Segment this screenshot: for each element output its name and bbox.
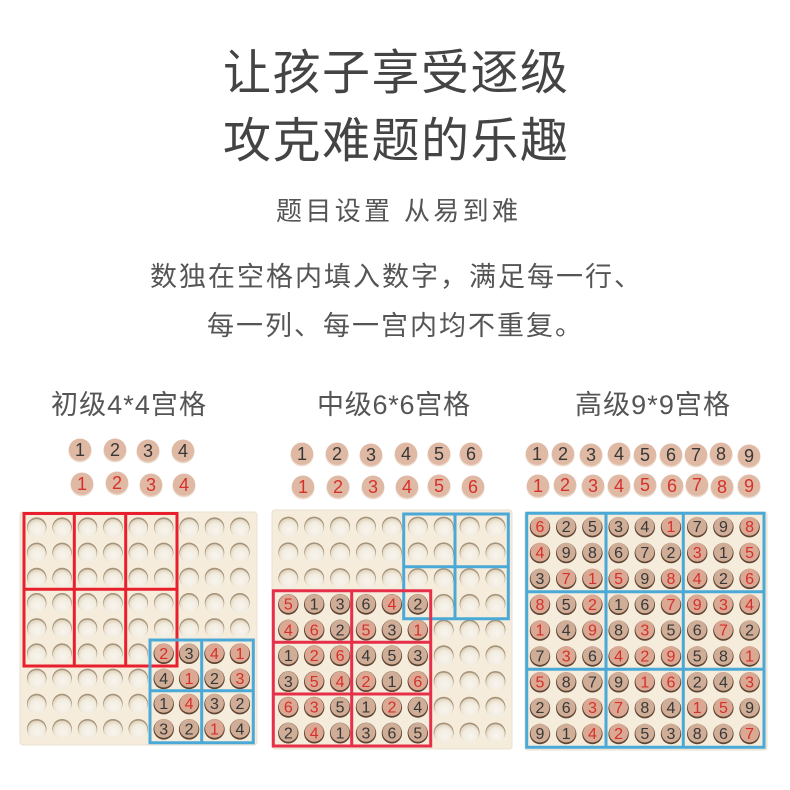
filled pieces: intermediate: 4: [336, 674, 345, 691]
filled pieces: advanced: 3: [745, 674, 754, 691]
filled pieces: advanced: 2: [667, 545, 676, 562]
filled pieces: advanced: 4: [745, 597, 754, 614]
filled pieces: intermediate: 2: [362, 674, 371, 691]
loose pieces: advanced: 2: [558, 444, 568, 464]
loose pieces: advanced: 6: [667, 476, 677, 496]
filled pieces: advanced: 6: [745, 571, 754, 588]
filled pieces: intermediate: 1: [362, 700, 371, 716]
loose pieces: beginner: [68, 438, 196, 497]
filled pieces: advanced: [530, 517, 760, 744]
heading: intermediate: 中级6*6宫格: [317, 390, 470, 420]
filled pieces: advanced: 4: [536, 545, 545, 562]
filled pieces: beginner: 2: [210, 671, 219, 688]
loose pieces: intermediate: [290, 442, 485, 499]
filled pieces: advanced: 2: [588, 597, 597, 614]
filled pieces: advanced: 5: [693, 648, 702, 666]
filled pieces: beginner: 2: [159, 646, 168, 663]
loose pieces: advanced: 8: [716, 444, 726, 464]
heading: advanced: 高级9*9宫格: [575, 390, 730, 420]
blue grid: 4*4 outline: [404, 514, 508, 619]
filled pieces: intermediate: 6: [387, 725, 396, 742]
loose pieces: intermediate: 5: [434, 476, 444, 496]
filled pieces: beginner: 3: [235, 671, 244, 688]
filled pieces: advanced: 6: [588, 648, 597, 666]
filled pieces: intermediate: 2: [336, 622, 345, 639]
filled pieces: advanced: 5: [562, 597, 571, 614]
filled pieces: advanced: 2: [614, 726, 623, 743]
filled pieces: advanced: 7: [640, 545, 649, 562]
loose pieces: advanced: 5: [640, 475, 650, 495]
filled pieces: advanced: 8: [745, 519, 754, 536]
filled pieces: advanced: 4: [640, 519, 649, 536]
loose pieces: intermediate: 5: [434, 444, 444, 464]
filled pieces: advanced: 1: [693, 700, 702, 717]
description text: 每一列、每一宫内均不重复。: [207, 311, 582, 341]
filled pieces: intermediate: 3: [310, 700, 319, 716]
loose pieces: advanced: 6: [666, 445, 676, 465]
filled pieces: intermediate: 4: [362, 648, 371, 665]
board: beginner: [20, 512, 257, 745]
filled pieces: intermediate: 1: [284, 648, 293, 665]
filled pieces: advanced: 2: [562, 519, 571, 536]
filled pieces: advanced: 8: [667, 571, 676, 588]
loose pieces: advanced: 2: [560, 475, 570, 495]
filled pieces: advanced: 5: [614, 571, 623, 588]
loose pieces: beginner: 1: [75, 440, 85, 460]
filled pieces: intermediate: 1: [336, 725, 345, 742]
filled pieces: advanced: 3: [562, 648, 571, 666]
board: advanced: [525, 512, 767, 750]
description text: 数独在空格内填入数字，满足每一行、: [150, 262, 641, 292]
filled pieces: advanced: 2: [693, 674, 702, 691]
filled pieces: beginner: 3: [210, 696, 219, 713]
loose pieces: beginner: 4: [178, 441, 188, 461]
filled pieces: advanced: 7: [693, 519, 702, 536]
title: 让孩子享受逐级: [223, 47, 568, 100]
filled pieces: advanced: 8: [719, 648, 728, 666]
filled pieces: advanced: 7: [614, 700, 623, 717]
filled pieces: advanced: 6: [640, 597, 649, 614]
subtitle: 题目设置 从易到难: [276, 196, 518, 226]
filled pieces: advanced: 5: [588, 519, 597, 536]
loose pieces: intermediate: 1: [298, 477, 308, 497]
filled pieces: advanced: 5: [667, 623, 676, 640]
filled pieces: advanced: 2: [640, 648, 649, 666]
filled pieces: intermediate: 5: [310, 674, 319, 691]
red grid: 6*6 outline: [24, 514, 177, 666]
filled pieces: beginner: 4: [159, 671, 168, 688]
filled pieces: advanced: 8: [614, 623, 623, 640]
filled pieces: advanced: 9: [719, 519, 728, 536]
filled pieces: intermediate: 5: [284, 596, 293, 614]
loose pieces: advanced: 4: [614, 444, 624, 464]
filled pieces: intermediate: 1: [413, 622, 422, 639]
filled pieces: advanced: 3: [588, 700, 597, 717]
heading: beginner: 初级4*4宫格: [51, 390, 206, 420]
filled pieces: advanced: 3: [693, 545, 702, 562]
filled pieces: intermediate: 1: [387, 674, 396, 691]
loose pieces: intermediate: 6: [466, 444, 476, 464]
blue grid: 4*4 outline: [150, 640, 253, 743]
panel: beginner 4*4: [20, 390, 257, 745]
filled pieces: intermediate: 6: [284, 700, 293, 716]
loose pieces: advanced: 3: [586, 445, 596, 465]
loose pieces: intermediate: 3: [366, 445, 376, 465]
filled pieces: advanced: 3: [667, 726, 676, 743]
loose pieces: advanced: 8: [717, 477, 727, 497]
filled pieces: intermediate: 3: [387, 622, 396, 639]
filled pieces: beginner: 1: [235, 646, 244, 663]
filled pieces: advanced: 2: [719, 571, 728, 588]
panel: intermediate 6*6: [272, 390, 512, 749]
filled pieces: advanced: 9: [614, 674, 623, 691]
loose pieces: advanced: 1: [533, 476, 543, 496]
filled pieces: advanced: 5: [745, 545, 754, 562]
filled pieces: intermediate: 3: [413, 648, 422, 665]
filled pieces: beginner: 1: [185, 671, 194, 688]
filled pieces: advanced: 8: [640, 700, 649, 717]
filled pieces: intermediate: 4: [284, 622, 293, 639]
panel: advanced 9*9: [525, 390, 767, 750]
filled pieces: intermediate: 4: [310, 725, 319, 742]
filled pieces: intermediate: 5: [413, 725, 422, 742]
filled pieces: advanced: 8: [562, 674, 571, 691]
filled pieces: advanced: 1: [640, 674, 649, 691]
filled pieces: advanced: 1: [614, 597, 623, 614]
filled pieces: beginner: 3: [159, 721, 168, 738]
filled pieces: beginner: 1: [159, 696, 168, 713]
filled pieces: advanced: 9: [667, 648, 676, 666]
filled pieces: advanced: 1: [667, 519, 676, 536]
loose pieces: intermediate: 6: [468, 477, 478, 497]
filled pieces: advanced: 8: [588, 545, 597, 562]
filled pieces: beginner: 1: [210, 721, 219, 738]
filled pieces: beginner: 2: [185, 721, 194, 738]
loose pieces: beginner: 3: [146, 475, 156, 495]
filled pieces: intermediate: 6: [310, 622, 319, 639]
loose pieces: intermediate: 2: [333, 477, 343, 497]
filled pieces: advanced: 7: [719, 623, 728, 640]
filled pieces: intermediate: 2: [284, 725, 293, 742]
filled pieces: intermediate: 2: [310, 648, 319, 665]
filled pieces: intermediate: 5: [362, 622, 371, 639]
filled pieces: advanced: 5: [719, 700, 728, 717]
filled pieces: intermediate: 5: [387, 648, 396, 665]
loose pieces: advanced: 1: [532, 444, 542, 464]
filled pieces: intermediate: 2: [387, 700, 396, 716]
filled pieces: advanced: 9: [745, 700, 754, 717]
filled pieces: advanced: 7: [667, 597, 676, 614]
filled pieces: advanced: 1: [562, 726, 571, 743]
filled pieces: advanced: 6: [614, 545, 623, 562]
filled pieces: beginner: 3: [185, 646, 194, 663]
loose pieces: beginner: 3: [143, 441, 153, 461]
loose pieces: intermediate: 4: [401, 444, 411, 464]
filled pieces: advanced: 6: [562, 700, 571, 717]
filled pieces: advanced: 3: [536, 571, 545, 588]
loose pieces: beginner: 1: [77, 474, 87, 494]
filled pieces: intermediate: 3: [284, 674, 293, 691]
filled pieces: advanced: 9: [693, 597, 702, 614]
filled pieces: advanced: 9: [640, 571, 649, 588]
loose pieces: advanced: 4: [614, 476, 624, 496]
loose pieces: intermediate: 3: [368, 477, 378, 497]
filled pieces: advanced: 7: [536, 648, 545, 666]
filled pieces: beginner: 4: [235, 721, 244, 738]
filled pieces: advanced: 5: [640, 726, 649, 743]
filled pieces: advanced: 7: [745, 726, 754, 743]
filled pieces: advanced: 6: [667, 674, 676, 691]
loose pieces: intermediate: 1: [297, 444, 307, 464]
filled pieces: advanced: 6: [719, 726, 728, 743]
filled pieces: advanced: 4: [614, 648, 623, 666]
title: 攻克难题的乐趣: [223, 115, 568, 168]
filled pieces: intermediate: 6: [413, 674, 422, 691]
loose pieces: advanced: 9: [744, 446, 754, 466]
filled pieces: advanced: 8: [536, 597, 545, 614]
filled pieces: advanced: 4: [719, 674, 728, 691]
filled pieces: advanced: 1: [536, 623, 545, 640]
filled pieces: advanced: 7: [588, 674, 597, 691]
filled pieces: advanced: 4: [588, 726, 597, 743]
filled pieces: beginner: [154, 644, 250, 740]
red grid: 6*6 outline: [273, 591, 431, 746]
filled pieces: beginner: 4: [185, 696, 194, 713]
filled pieces: intermediate: 4: [387, 596, 396, 614]
filled pieces: beginner: 4: [210, 646, 219, 663]
filled pieces: intermediate: [278, 594, 428, 744]
filled pieces: advanced: 8: [693, 726, 702, 743]
filled pieces: intermediate: 2: [413, 596, 422, 614]
filled pieces: advanced: 3: [640, 623, 649, 640]
loose pieces: advanced: 9: [744, 476, 754, 496]
filled pieces: advanced: 4: [562, 623, 571, 640]
loose pieces: advanced: [525, 442, 761, 499]
filled pieces: intermediate: 3: [336, 596, 345, 614]
filled pieces: advanced: 9: [562, 545, 571, 562]
filled pieces: advanced: 6: [693, 623, 702, 640]
filled pieces: advanced: 9: [588, 623, 597, 640]
filled pieces: intermediate: 5: [336, 700, 345, 716]
title: [223, 47, 568, 168]
description text: [150, 262, 641, 341]
loose pieces: beginner: 2: [112, 473, 122, 493]
loose pieces: beginner: 2: [110, 440, 120, 460]
filled pieces: intermediate: 1: [310, 596, 319, 614]
filled pieces: advanced: 9: [536, 726, 545, 743]
filled pieces: advanced: 2: [745, 623, 754, 640]
filled pieces: advanced: 2: [536, 700, 545, 717]
filled pieces: intermediate: 6: [362, 596, 371, 614]
loose pieces: advanced: 5: [640, 445, 650, 465]
filled pieces: advanced: 4: [693, 571, 702, 588]
filled pieces: intermediate: 6: [336, 648, 345, 665]
loose pieces: advanced: 7: [692, 475, 702, 495]
filled pieces: advanced: 1: [745, 648, 754, 666]
loose pieces: advanced: 7: [691, 445, 701, 465]
filled pieces: intermediate: 4: [413, 700, 422, 716]
board: intermediate: [272, 510, 512, 749]
loose pieces: beginner: 4: [179, 475, 189, 495]
filled pieces: advanced: 3: [614, 519, 623, 536]
filled pieces: advanced: 7: [562, 571, 571, 588]
filled pieces: advanced: 4: [667, 700, 676, 717]
filled pieces: intermediate: 3: [362, 725, 371, 742]
filled pieces: advanced: 1: [719, 545, 728, 562]
loose pieces: intermediate: 2: [332, 444, 342, 464]
filled pieces: advanced: 6: [536, 519, 545, 536]
loose pieces: intermediate: 4: [402, 477, 412, 497]
filled pieces: advanced: 3: [719, 597, 728, 614]
filled pieces: advanced: 5: [536, 674, 545, 691]
blue grid: 9*9 outline: [527, 513, 764, 747]
filled pieces: advanced: 1: [588, 571, 597, 588]
loose pieces: advanced: 3: [588, 476, 598, 496]
filled pieces: beginner: 2: [235, 696, 244, 713]
